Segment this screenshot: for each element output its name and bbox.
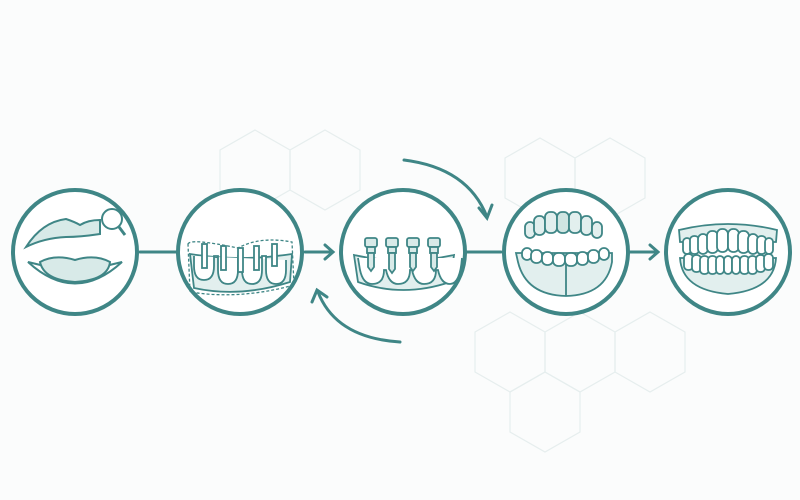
step 4: teeth with gum arch — [504, 190, 628, 314]
step 5: full denture — [666, 190, 790, 314]
connector lines and arrows — [140, 160, 658, 342]
step 1: lips exam — [13, 190, 137, 314]
step 2: dental mold — [178, 190, 302, 314]
step 3: implants — [341, 190, 465, 314]
